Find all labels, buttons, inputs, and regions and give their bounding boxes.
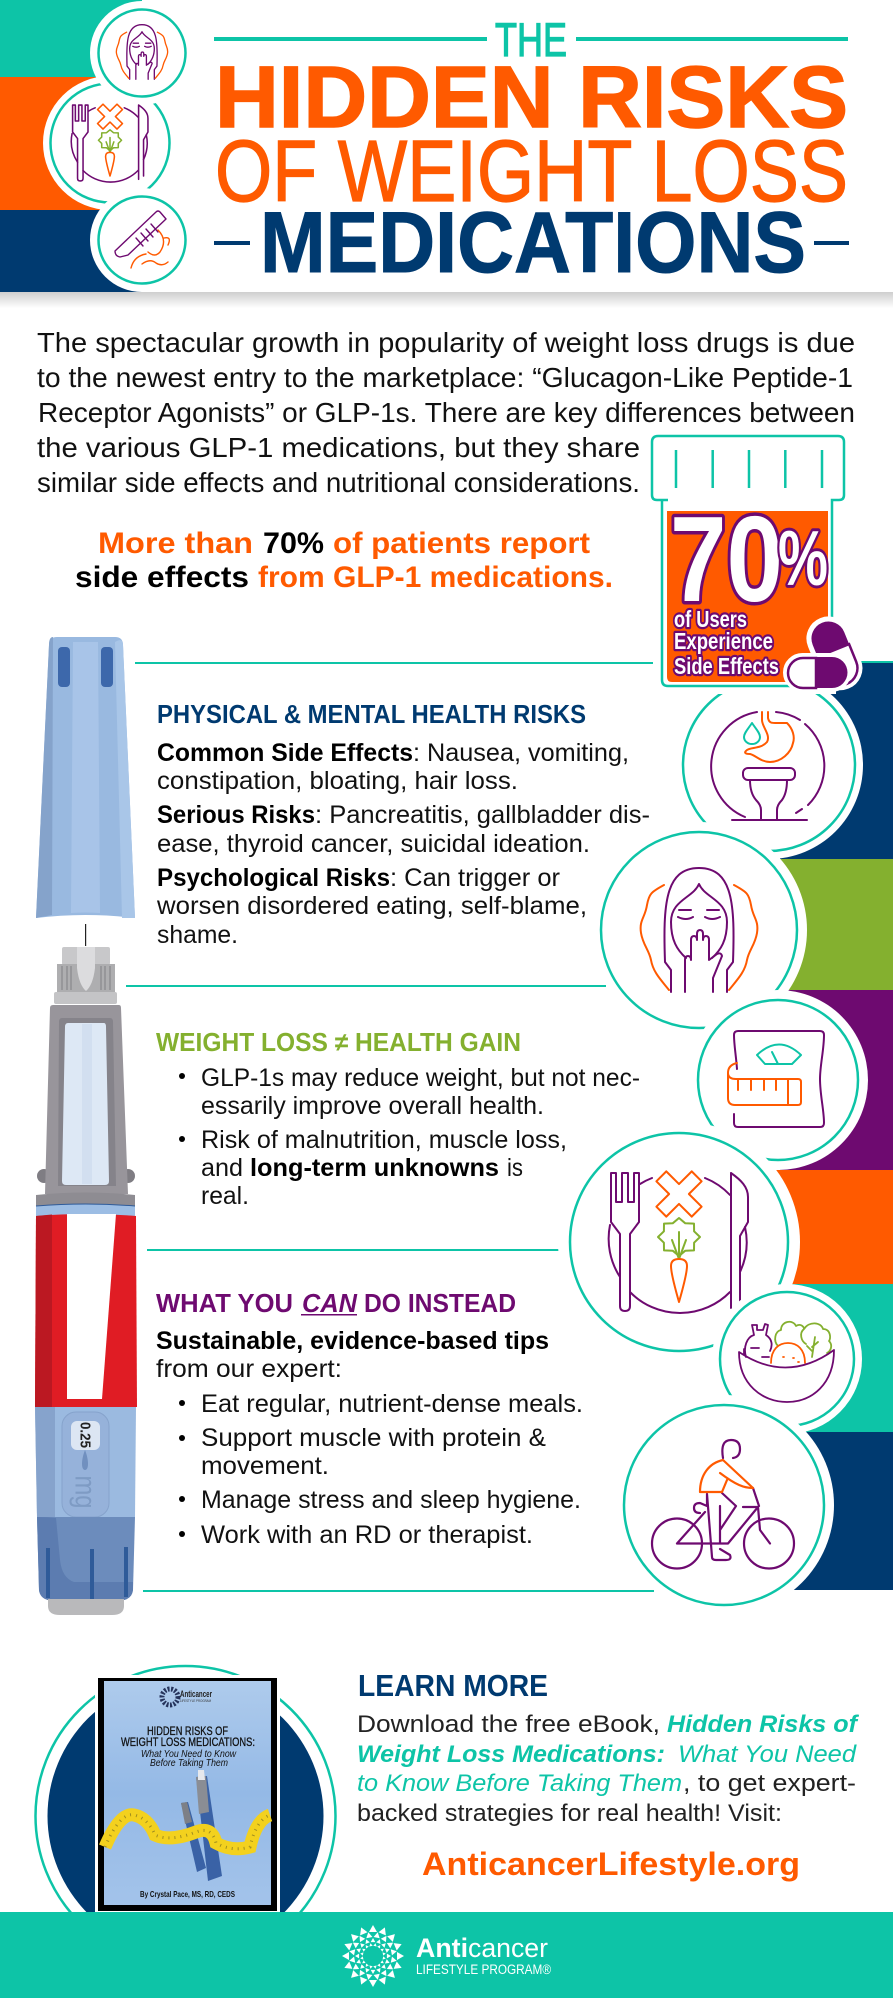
footer bar	[0, 1912, 893, 1998]
body text	[357, 1711, 860, 1827]
callout: 70 percent highlight	[75, 527, 613, 594]
intro paragraph	[37, 327, 855, 498]
title line: HIDDEN RISKS: HIDDEN RISKS	[215, 49, 848, 146]
intro paragraph: the various GLP-1 medications, but they share	[37, 432, 640, 463]
learn more block	[357, 1668, 860, 1882]
heading: WHAT YOU	[156, 1288, 293, 1318]
icon: header face	[116, 25, 168, 79]
heading: DO INSTEAD	[364, 1288, 516, 1318]
red barrel with white window	[35, 1214, 137, 1407]
heading	[156, 1288, 516, 1318]
right colour bands	[760, 661, 893, 1590]
pen dial base	[37, 1517, 135, 1615]
body text: Weight Loss Medications:	[357, 1741, 665, 1768]
icon: scale and tape measure	[728, 1031, 824, 1127]
logo wordmark: Anti	[416, 1933, 468, 1963]
icon: face with hand	[641, 868, 757, 992]
callout: 70 percent highlight: More than	[98, 527, 253, 560]
bullets: long-term unknowns	[250, 1154, 499, 1182]
header band	[0, 0, 893, 308]
body text and bullets: Eat regular, nutrient-dense meals.	[201, 1390, 583, 1418]
cover title: HIDDEN RISKS OF	[147, 1724, 228, 1738]
bullets: Risk of malnutrition, muscle loss,	[201, 1126, 567, 1154]
heading: LEARN MORE	[358, 1668, 548, 1703]
grey collar and blue band	[36, 1192, 135, 1207]
body text and bullets	[156, 1327, 583, 1549]
cover title	[121, 1724, 255, 1899]
70 percent: Side Effects	[674, 653, 779, 679]
panel: face icon circle	[591, 822, 807, 1038]
heading: PHYSICAL & MENTAL HEALTH RISKS	[157, 699, 586, 729]
cover logo: Anticancer	[180, 1689, 212, 1699]
icon: starburst mark	[342, 1925, 404, 1987]
intro paragraph: to the newest entry to the marketplace: “Glucagon-Like Peptide-1	[37, 362, 853, 393]
70 percent: Experience	[674, 628, 773, 654]
cover title: WEIGHT LOSS MEDICATIONS:	[121, 1735, 255, 1749]
body text and bullets: Manage stress and sleep hygiene.	[201, 1486, 581, 1514]
section: what you can do instead	[156, 1288, 583, 1549]
callout: 70 percent highlight: of patients report	[333, 527, 590, 560]
grey dose window body	[37, 1005, 135, 1194]
icon: cyclist	[652, 1440, 794, 1568]
body text and bullets: Work with an RD or therapist.	[201, 1521, 533, 1549]
body text: ease, thyroid cancer, suicidal ideation.	[157, 830, 590, 858]
heading: CAN	[302, 1288, 358, 1318]
cover logo: LIFESTYLE PROGRAM	[180, 1698, 211, 1703]
bullets: and	[201, 1154, 243, 1182]
intro paragraph: The spectacular growth in popularity of weight loss drugs is due	[37, 327, 855, 358]
icon: plate with fork, knife and carrot	[609, 1159, 748, 1313]
ebook cover	[95, 1675, 280, 1912]
logo wordmark	[416, 1933, 551, 1977]
title line: THE: THE	[495, 13, 567, 66]
lid ticks	[676, 450, 822, 488]
icon: stomach and toilet	[711, 712, 824, 820]
70 percent: 70	[670, 491, 783, 627]
website link: AnticancerLifestyle.org	[422, 1846, 800, 1882]
body text: constipation, bloating, hair loss.	[157, 767, 518, 795]
panel: stomach and toilet icon circle	[675, 671, 863, 859]
body text: Psychological Risks	[157, 864, 390, 892]
panel: scale icon circle	[688, 990, 868, 1170]
body text: : Nausea, vomiting,	[413, 739, 629, 767]
bullets	[179, 1064, 640, 1210]
dose dial	[62, 1412, 109, 1517]
title	[214, 13, 849, 291]
icon: capsules	[787, 615, 864, 692]
body text: : Pancreatitis, gallbladder dis-	[315, 801, 650, 829]
body text and bullets: Sustainable, evidence-based tips	[156, 1327, 549, 1355]
callout: 70 percent highlight: from GLP-1 medications.	[258, 561, 613, 594]
bullets: real.	[201, 1182, 249, 1210]
body text: : Can trigger or	[390, 864, 560, 892]
cover title: What You Need to Know	[141, 1748, 237, 1760]
panel: bowl icon circle	[712, 1284, 862, 1434]
body text: Download the free eBook,	[357, 1711, 660, 1738]
logo wordmark: cancer	[468, 1933, 548, 1963]
body text: to Know Before Taking Them	[357, 1770, 682, 1797]
pen cap	[36, 637, 135, 918]
body text: What You Need	[678, 1741, 857, 1768]
body text: Hidden Risks of	[667, 1711, 860, 1738]
body text: shame.	[157, 921, 238, 949]
cover title: Before Taking Them	[150, 1757, 228, 1769]
body text and bullets: Support muscle with protein &	[201, 1424, 546, 1452]
section: weight loss does not equal health gain	[156, 1027, 640, 1210]
icon: header plate	[71, 97, 148, 182]
body text: Common Side Effects	[157, 739, 413, 767]
needle	[85, 924, 86, 946]
cover photo: pens and tape measure	[105, 1770, 270, 1881]
panel: pill bottle 70% badge	[652, 430, 864, 694]
dose dial: mg	[68, 1476, 102, 1508]
needle hub and collar	[54, 947, 117, 1004]
icon: bowl of vegetables	[739, 1322, 834, 1402]
body text and bullets: from our expert:	[156, 1355, 342, 1383]
cover title: By Crystal Pace, MS, RD, CEDS	[140, 1889, 235, 1899]
callout: 70 percent highlight: 70%	[263, 527, 324, 560]
heading: WEIGHT LOSS ≠ HEALTH GAIN	[156, 1027, 521, 1057]
body text: backed strategies for real health! Visit:	[357, 1800, 782, 1827]
intro paragraph: similar side effects and nutritional considerations.	[37, 467, 640, 498]
bottle lid and body	[652, 436, 844, 686]
body text: worsen disordered eating, self-blame,	[156, 892, 587, 920]
dose dial: 0.25	[76, 1422, 94, 1448]
panel: bicycle icon circle	[614, 1395, 834, 1615]
70 percent	[670, 491, 828, 679]
title line: MEDICATIONS: MEDICATIONS	[260, 195, 806, 291]
panel: plate icon circle	[558, 1121, 800, 1363]
lower blue barrel	[35, 1407, 136, 1517]
orange label	[667, 511, 828, 682]
section: physical and mental health risks	[156, 699, 650, 949]
bullets: is	[507, 1154, 523, 1182]
bullets: essarily improve overall health.	[201, 1092, 544, 1120]
body text	[156, 739, 650, 949]
70 percent: %	[778, 514, 828, 602]
callout: 70 percent highlight: side effects	[75, 561, 249, 594]
divider lines	[126, 662, 654, 1592]
cover logo	[162, 1689, 212, 1705]
icon: header comb and hair	[115, 211, 169, 268]
body text: Serious Risks	[157, 801, 315, 829]
body text and bullets: movement.	[201, 1452, 329, 1480]
body text: , to get expert-	[683, 1770, 856, 1797]
logo wordmark: LIFESTYLE PROGRAM®	[416, 1962, 551, 1977]
injector pen illustration	[35, 637, 137, 1615]
book backdrop circle	[36, 1666, 336, 1966]
bullets: GLP-1s may reduce weight, but not nec-	[201, 1064, 640, 1092]
70 percent: of Users	[674, 606, 747, 632]
footer logo	[342, 1925, 551, 1987]
intro paragraph: Receptor Agonists” or GLP-1s. There are key differences between	[38, 397, 855, 428]
